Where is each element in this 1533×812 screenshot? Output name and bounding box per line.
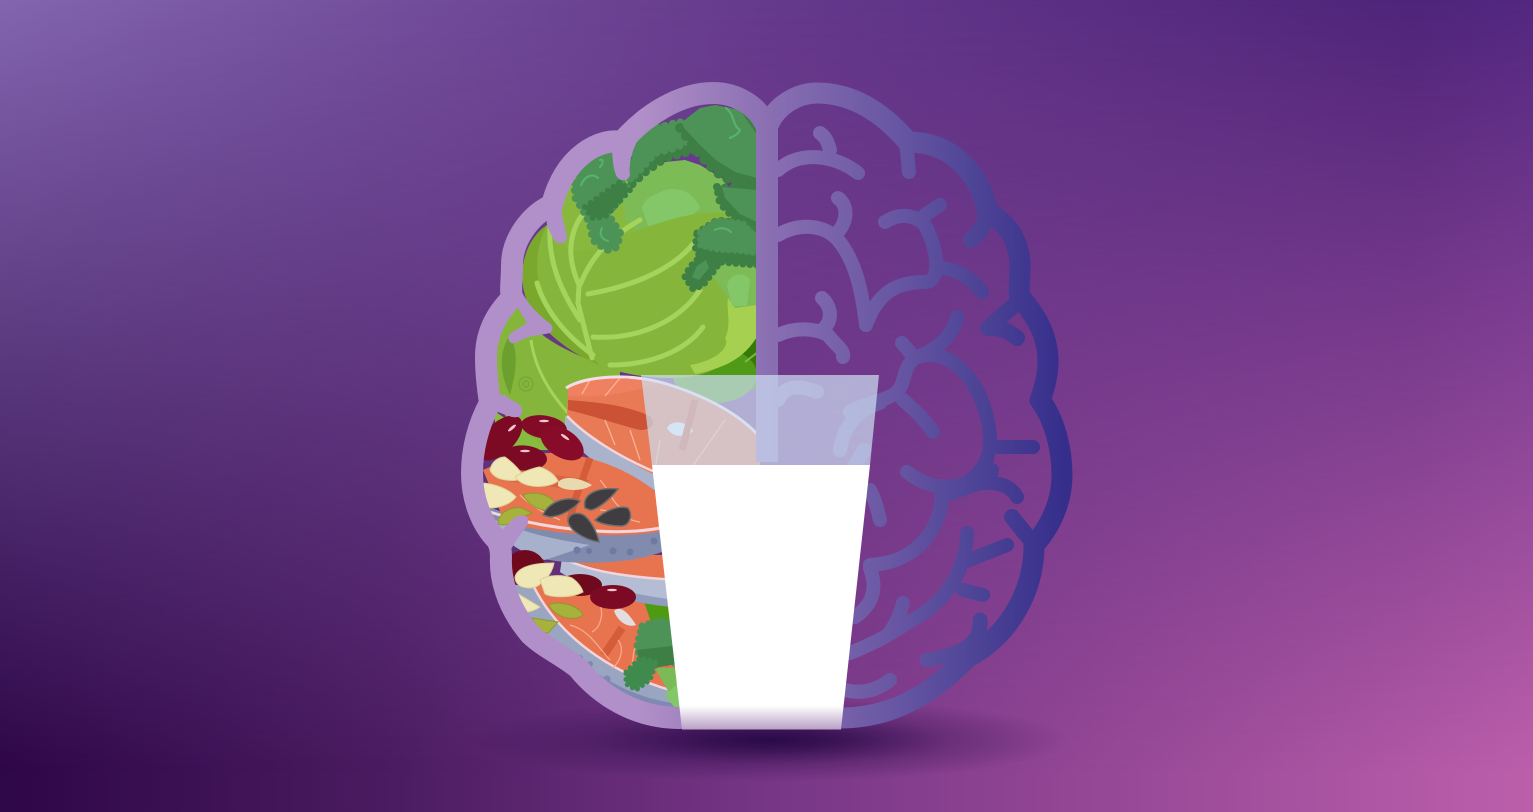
back cabbage leaf (562, 172, 636, 251)
broccoli head right (717, 187, 757, 229)
milk fill (652, 465, 870, 730)
left hemisphere inward folds (488, 135, 640, 555)
broccoli head band (630, 122, 695, 184)
small broccoli bottom (624, 617, 680, 707)
pumpkin and sunflower seeds (480, 457, 630, 633)
lower cabbage leaf (493, 305, 620, 450)
salmon steak top (565, 377, 760, 492)
broccoli head top (680, 105, 757, 193)
brain outline and folds (472, 93, 1062, 718)
broccoli head lower right (685, 220, 757, 289)
left hemisphere contour (472, 93, 767, 718)
broccoli heads (575, 105, 757, 289)
glass empty upper part (641, 375, 879, 465)
right hemisphere folds (778, 133, 1033, 692)
kidney beans (484, 415, 636, 609)
broccoli head left (575, 152, 630, 250)
salmon steak third (560, 555, 668, 607)
milk glass (641, 375, 879, 730)
food filling left brain hemisphere (470, 105, 765, 720)
broccoli stalk right (712, 263, 756, 308)
right hemisphere contour (767, 93, 1062, 718)
main cabbage head (522, 213, 758, 378)
salmon steak middle (483, 453, 670, 563)
broccoli stalk (622, 160, 726, 230)
dark leaves (673, 338, 756, 403)
green leaf behind bottom broccoli (644, 603, 670, 622)
salmon steak bottom (516, 585, 675, 707)
ground shadow (470, 698, 1070, 782)
